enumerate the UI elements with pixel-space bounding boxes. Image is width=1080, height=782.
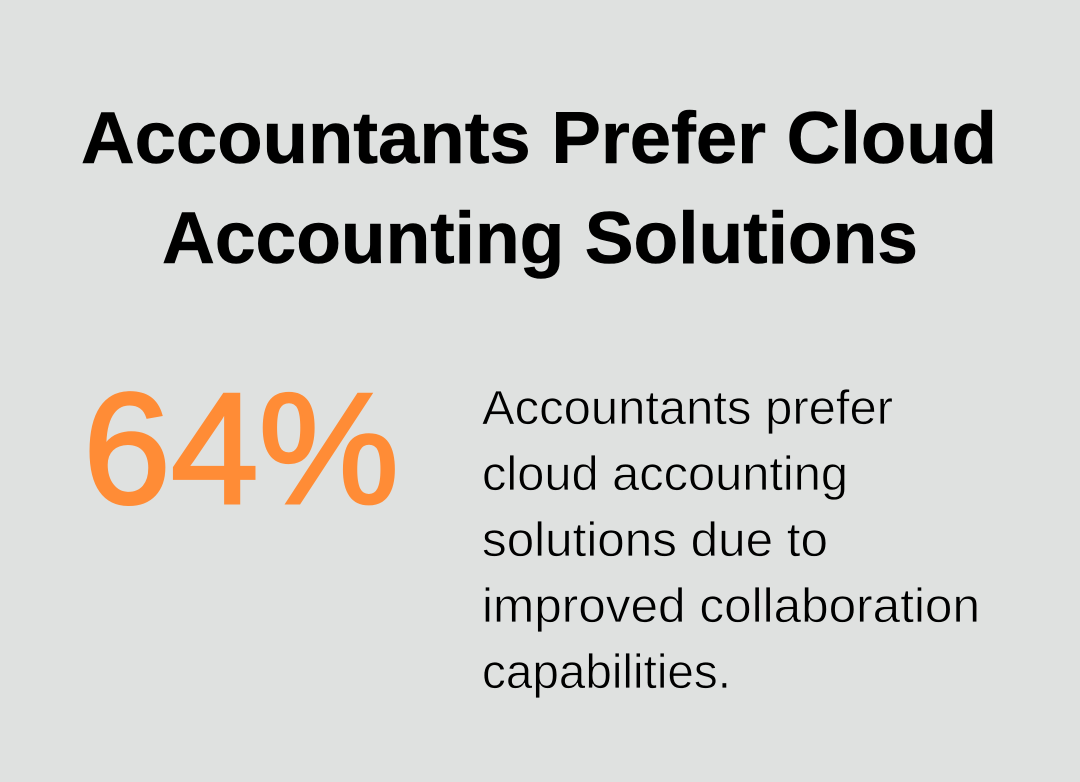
title [81, 98, 997, 279]
description text: improved collaboration [482, 580, 980, 633]
description text [482, 382, 980, 699]
title: Accounting Solutions [162, 198, 918, 279]
description text: solutions due to [482, 514, 828, 567]
description text: cloud accounting [482, 448, 848, 501]
statistic: 64%: 64% [83, 361, 399, 537]
description text: Accountants prefer [482, 382, 893, 435]
title: Accountants Prefer Cloud [81, 98, 997, 179]
description text: capabilities. [482, 646, 731, 699]
